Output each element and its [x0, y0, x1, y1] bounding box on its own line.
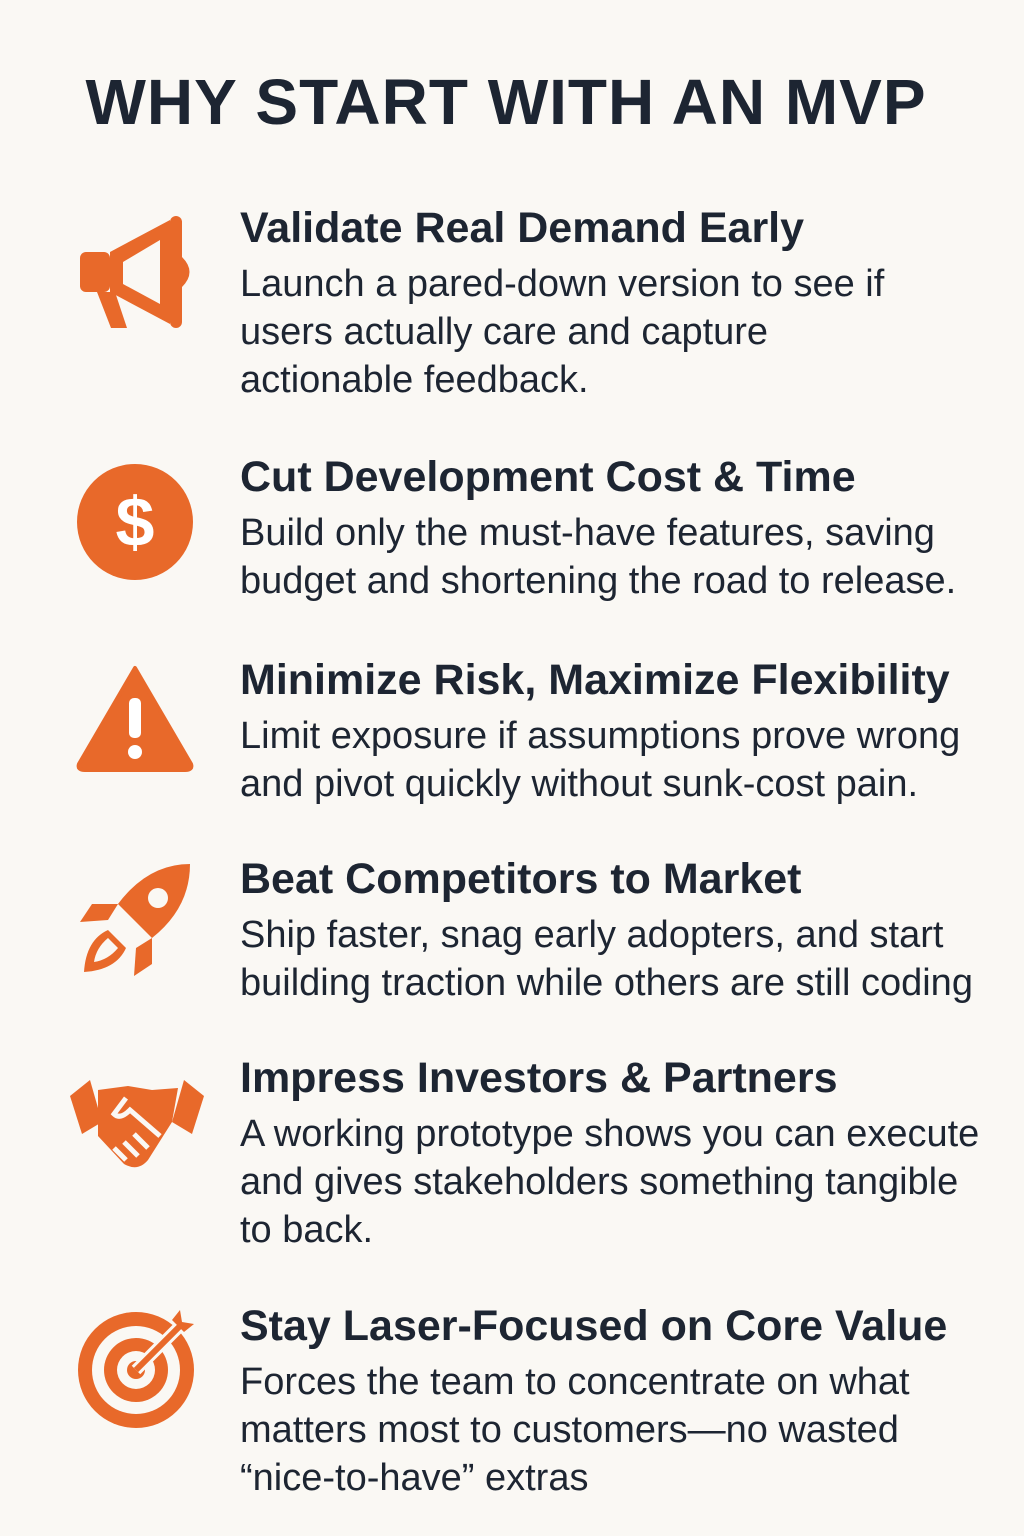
section 3: and pivot quickly without sunk-cost pain. [240, 763, 918, 805]
section 3 [240, 656, 960, 805]
section 4: building traction while others are still coding [240, 962, 973, 1004]
section 4: Beat Competitors to Market [240, 855, 801, 903]
section 3: Minimize Risk, Maximize Flexibility [240, 656, 950, 704]
section 1: Launch a pared-down version to see if [240, 263, 884, 305]
icon: warning [76, 666, 194, 772]
section 6: “nice-to-have” extras [240, 1457, 588, 1499]
section 6: Forces the team to concentrate on what [240, 1361, 910, 1403]
icon: dollar [77, 464, 193, 580]
icon: target [78, 1310, 194, 1428]
icon: megaphone [80, 216, 190, 328]
section 4 [240, 855, 973, 1004]
section 6: matters most to customers—no wasted [240, 1409, 899, 1451]
section 6 [240, 1302, 947, 1499]
section 1: actionable feedback. [240, 359, 589, 401]
section 5: Impress Investors & Partners [240, 1054, 838, 1102]
section 5 [240, 1054, 979, 1251]
title: WHY START WITH AN MVP [85, 66, 927, 138]
section 3: Limit exposure if assumptions prove wrong [240, 715, 960, 757]
section 1: Validate Real Demand Early [240, 204, 804, 252]
section 1: users actually care and capture [240, 311, 768, 353]
section 2: budget and shortening the road to release. [240, 560, 956, 602]
section 2: Cut Development Cost & Time [240, 453, 856, 501]
section 4: Ship faster, snag early adopters, and start [240, 914, 943, 956]
icon: dollar: $ [116, 483, 154, 561]
section 5: A working prototype shows you can execute [240, 1113, 979, 1155]
section 2 [240, 453, 956, 602]
section 6: Stay Laser-Focused on Core Value [240, 1302, 947, 1350]
section 5: and gives stakeholders something tangible [240, 1161, 958, 1203]
icon: handshake [70, 1080, 204, 1168]
section 1 [240, 204, 884, 401]
icon: rocket [80, 864, 190, 976]
section 5: to back. [240, 1209, 373, 1251]
section 2: Build only the must-have features, saving [240, 512, 935, 554]
